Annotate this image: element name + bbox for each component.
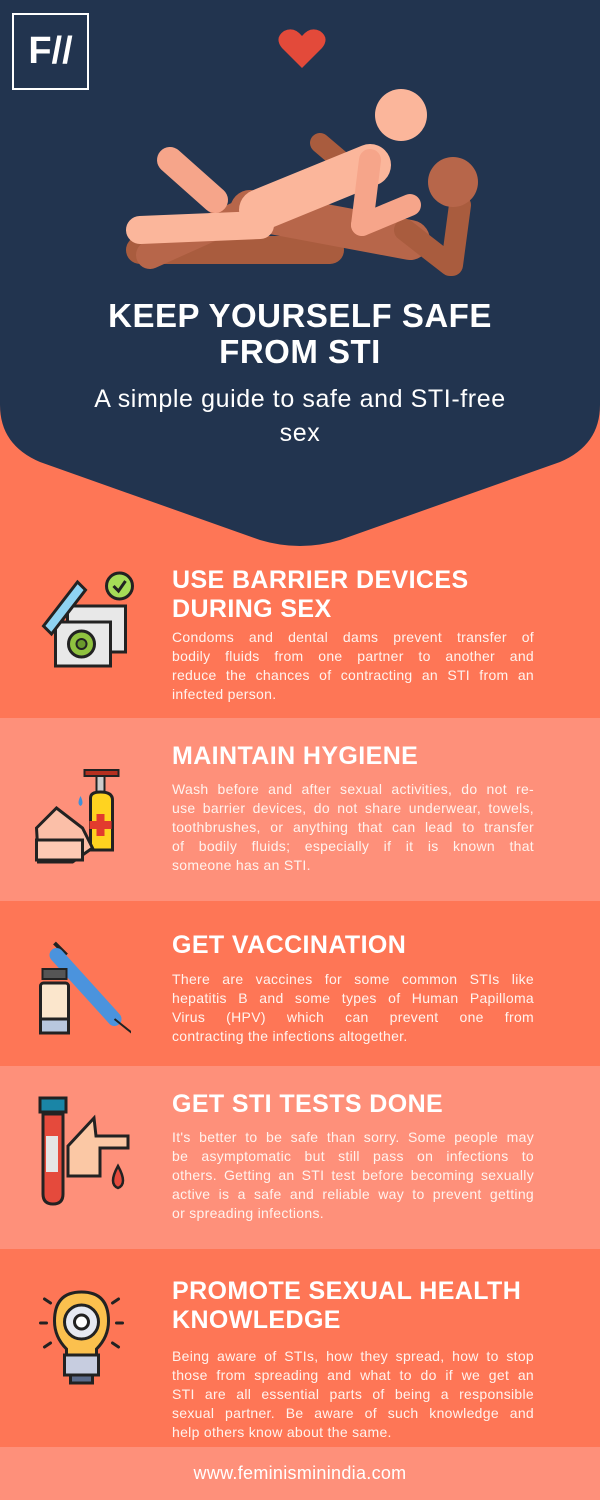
text: Being aware of STIs, how they spread, how to stop [172, 1348, 534, 1364]
text: toothbrushes, or anything that can lead to transfer [172, 819, 534, 835]
text: infected person. [172, 686, 276, 702]
text: sexual partner. Be aware of such knowledge and [172, 1405, 534, 1421]
illustration: couple [126, 89, 478, 276]
text: of bodily fluids; especially if it is known that [172, 838, 534, 854]
icon: syringe and vial [39, 942, 131, 1034]
text: Virus (HPV) which can prevent one from [172, 1009, 534, 1025]
text: use barrier devices, do not share underwear, towels, [172, 800, 534, 816]
subtitle: sex [280, 419, 320, 447]
title: FROM STI [219, 333, 381, 370]
icon: heart [278, 29, 326, 68]
title [108, 297, 492, 370]
heading: USE BARRIER DEVICES [172, 566, 469, 594]
footer [0, 1447, 600, 1500]
text [172, 971, 534, 1044]
heading: MAINTAIN HYGIENE [172, 742, 418, 770]
heading: DURING SEX [172, 595, 332, 623]
text: Wash before and after sexual activities, do not re- [172, 781, 534, 797]
heading [172, 566, 469, 623]
icon: light bulb with gear [39, 1290, 124, 1384]
text: contracting the infections altogether. [172, 1028, 408, 1044]
text: bodily fluids from one partner to another and [172, 648, 534, 664]
logo [12, 13, 89, 90]
logo: F// [28, 30, 73, 72]
header background [0, 0, 600, 546]
text: someone has an STI. [172, 857, 311, 873]
text [172, 781, 534, 873]
text: hepatitis B and some types of Human Papilloma [172, 990, 534, 1006]
text: Condoms and dental dams prevent transfer of [172, 629, 534, 645]
panel: vaccination [39, 931, 534, 1044]
subtitle: A simple guide to safe and STI-free [94, 385, 506, 413]
text: be asymptomatic but still pass on infections to [172, 1148, 534, 1164]
subtitle [94, 385, 506, 447]
icon: condom packets [42, 572, 134, 668]
heading [172, 1277, 521, 1334]
text [172, 629, 534, 702]
text: There are vaccines for some common STIs like [172, 971, 534, 987]
text [172, 1129, 534, 1221]
text [172, 1348, 534, 1440]
title: KEEP YOURSELF SAFE [108, 297, 492, 334]
text: others. Getting an STI test before becoming sexually [172, 1167, 534, 1183]
panel: sexual health knowledge [39, 1277, 534, 1440]
text: active is a safe and reliable way to prevent getting [172, 1186, 534, 1202]
heading: GET VACCINATION [172, 931, 406, 959]
text: those from spreading and what to do if we get an [172, 1367, 534, 1383]
heading: KNOWLEDGE [172, 1306, 341, 1334]
footer: www.feminisminindia.com [194, 1463, 406, 1483]
icon: blood test tube and hand [38, 1096, 130, 1206]
panel: hygiene [0, 718, 600, 901]
text: STI are all essential parts of being a responsible [172, 1386, 534, 1402]
text: or spreading infections. [172, 1205, 324, 1221]
icon: hand washing [35, 769, 120, 864]
heading: PROMOTE SEXUAL HEALTH [172, 1277, 521, 1305]
heading: GET STI TESTS DONE [172, 1090, 443, 1118]
text: It's better to be safe than sorry. Some people may [172, 1129, 534, 1145]
text: help others know about the same. [172, 1424, 392, 1440]
panel: barrier devices [42, 566, 534, 702]
panel: STI tests [0, 1066, 600, 1249]
text: reduce the chances of contracting an STI from an [172, 667, 534, 683]
